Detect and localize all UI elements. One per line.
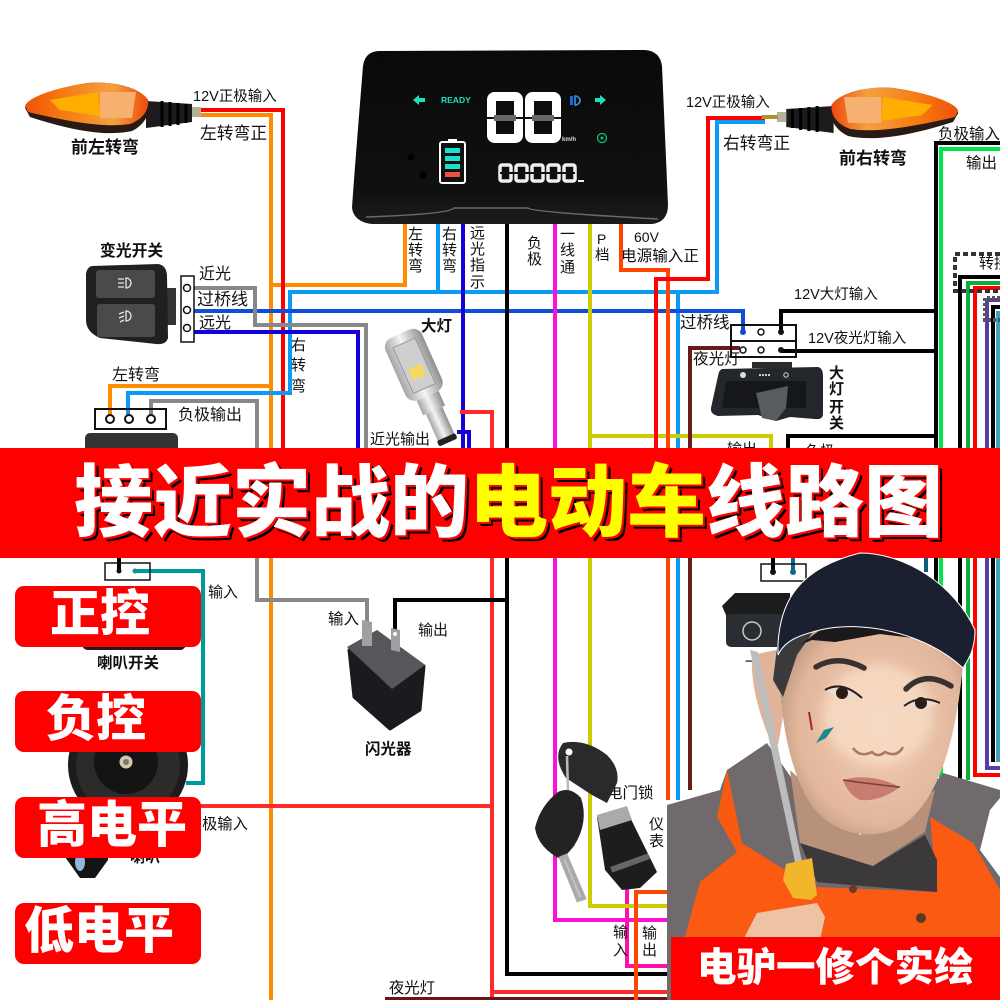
labels: P <box>597 231 606 247</box>
instrument panel <box>352 50 668 224</box>
high beam icon <box>570 96 580 105</box>
labels: 60V <box>634 229 660 245</box>
cheek marks <box>809 712 812 730</box>
labels: 表 <box>649 833 664 850</box>
badge: 低电平: 低电平 <box>24 903 174 959</box>
labels: 左 <box>408 226 423 243</box>
cap <box>778 553 975 668</box>
labels: 大 <box>829 364 844 382</box>
icon: ignition keys and lock <box>535 742 657 900</box>
wires: right turn and low/high beam <box>128 122 765 800</box>
R indicator <box>598 134 606 142</box>
hand <box>743 903 825 940</box>
labels: 输入 <box>328 610 359 628</box>
icon: headlight bulb <box>382 326 467 451</box>
labels: 关 <box>829 415 844 432</box>
labels: 电源输入正 <box>621 247 699 265</box>
labels: 右转弯正 <box>723 134 790 153</box>
READY: READY <box>441 95 471 105</box>
badge: 正控: 正控 <box>50 586 150 642</box>
labels: 负极输出 <box>178 406 242 424</box>
eyes <box>825 686 940 709</box>
odometer <box>500 165 584 181</box>
labels: 转 <box>408 242 423 259</box>
labels: 一 <box>560 226 575 243</box>
labels: 输出 <box>966 154 997 172</box>
badge: 负控: 负控 <box>46 691 146 747</box>
labels: 喇叭 <box>130 849 160 866</box>
labels: 一键 <box>745 654 774 671</box>
speed digits <box>487 96 561 138</box>
labels: 指 <box>470 257 485 274</box>
icon: dimmer switch <box>86 264 176 344</box>
mouth <box>843 777 900 800</box>
labels: 过桥线 <box>680 313 730 332</box>
labels: 输出 <box>727 441 757 458</box>
right arrow <box>595 95 606 105</box>
labels: 闪光器 <box>365 740 412 758</box>
badge: 负控 <box>15 691 201 752</box>
badge: 正控 <box>15 586 201 647</box>
icon: horn switch body <box>82 600 186 650</box>
labels: 远 <box>470 225 485 242</box>
labels: 夜光灯 <box>389 980 435 997</box>
icon: turn signal switch <box>85 433 178 453</box>
labels: 过桥线 <box>197 290 248 309</box>
battery gauge <box>440 139 465 183</box>
labels: 入 <box>613 942 628 959</box>
wires: left turn signal <box>110 110 405 1000</box>
km/h label: km/h <box>562 137 576 143</box>
wires: right side harness <box>781 143 1000 780</box>
caption tag: 电驴一修个实绘 <box>697 946 974 990</box>
labels: 前右转弯 <box>839 148 907 168</box>
labels: 输入 <box>208 584 238 601</box>
labels: 左转弯正 <box>200 124 267 143</box>
icon: front right turn signal <box>762 88 958 138</box>
labels: 弯 <box>408 258 423 275</box>
wires: power, negative and signal lines <box>200 118 771 1000</box>
labels: 弯 <box>291 378 306 395</box>
labels: 转 <box>442 242 457 259</box>
left arrow <box>413 95 425 105</box>
labels: 示 <box>470 274 485 291</box>
terminal box: start button <box>761 564 806 581</box>
labels: 极 <box>527 251 542 268</box>
labels: 前左转弯 <box>71 137 139 157</box>
face <box>752 615 965 834</box>
jacket <box>667 743 1000 1000</box>
labels: 输 <box>642 925 657 942</box>
labels: 12V正极输入 <box>193 88 277 105</box>
labels: 右 <box>291 337 306 354</box>
title banner <box>0 448 1000 558</box>
labels: 电门锁 <box>607 784 654 802</box>
labels: 右 <box>442 226 457 243</box>
terminal box: horn switch <box>105 563 150 580</box>
icon: headlight switch <box>711 362 823 421</box>
labels: 光 <box>470 241 485 258</box>
labels: 近光 <box>199 265 231 283</box>
labels: 输出 <box>418 622 448 639</box>
wires: horn <box>119 558 793 783</box>
labels: 输 <box>613 924 628 941</box>
terminal box: dimmer switch <box>181 276 194 342</box>
labels: 弯 <box>442 258 457 275</box>
labels: 夜光灯 <box>693 350 740 368</box>
labels: 变光开关 <box>100 241 163 260</box>
labels: 极输入 <box>202 816 248 833</box>
labels: 仪 <box>649 816 664 833</box>
caption tag <box>671 937 1000 1000</box>
icon: start button <box>722 593 790 647</box>
labels: 12V正极输入 <box>686 94 770 111</box>
labels: 左转弯 <box>112 366 160 384</box>
labels: 大灯 <box>421 317 453 335</box>
labels: 开 <box>829 399 844 416</box>
labels: 出 <box>642 942 657 959</box>
labels: 通 <box>560 259 575 276</box>
nose <box>853 747 903 755</box>
labels: 灯 <box>829 381 844 398</box>
icon: horn <box>60 705 188 878</box>
labels: 负 <box>527 235 542 252</box>
labels: 线 <box>560 242 575 259</box>
labels: 转 <box>291 357 306 374</box>
title text: 接近实战的电动车线路图 <box>74 458 943 547</box>
terminal box: headlight switch <box>731 325 796 357</box>
terminal box: turn switch <box>95 409 166 429</box>
badge: 高电平: 高电平 <box>37 797 187 853</box>
labels: 12V夜光灯输入 <box>808 330 906 347</box>
labels: 远光 <box>199 314 231 332</box>
neck <box>790 770 935 866</box>
icon: flasher relay <box>347 620 425 729</box>
labels: 近光输出 <box>370 431 430 448</box>
eyebrows <box>816 661 951 689</box>
icon: front left turn signal <box>25 83 201 133</box>
labels: 负极 <box>805 443 835 460</box>
labels: 喇叭开关 <box>97 654 160 672</box>
labels: 档 <box>595 247 610 264</box>
screwdriver <box>750 650 817 900</box>
labels: 12V大灯输入 <box>794 286 878 303</box>
labels: 负极输入 <box>938 125 1000 143</box>
